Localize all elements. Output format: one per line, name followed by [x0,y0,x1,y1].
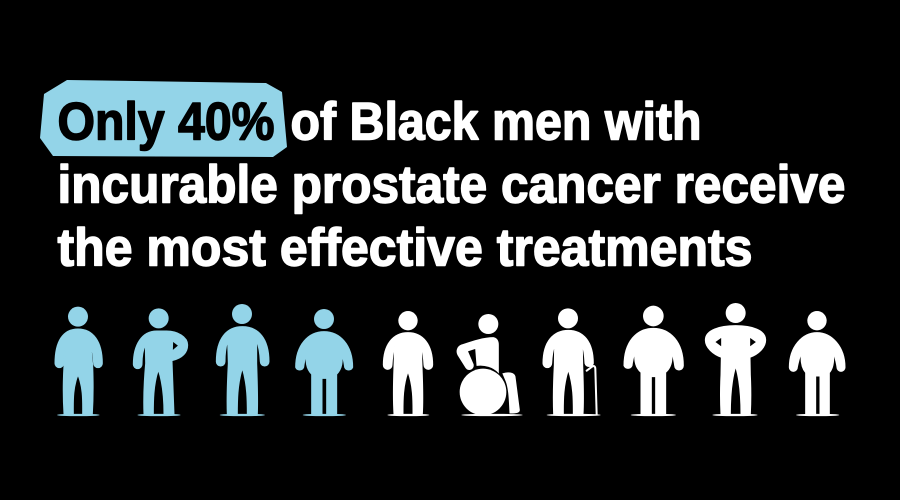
figure 1: standing man [55,307,102,416]
figure 9: man with hands on hips [705,303,766,416]
figure 6: wheelchair user [457,314,523,416]
figure 7: man with cane [543,308,601,416]
figure 10: stocky man [789,311,845,416]
figure 2: man with hand on hip [133,308,188,416]
figure 4: heavy-set man [296,309,353,416]
white figures: the remaining 60% [383,303,845,416]
headline text: incurable prostate cancer receive [58,156,846,214]
headline text [58,92,846,278]
headline text: of Black men with [290,92,702,152]
blue figures: the 40% [55,304,353,416]
highlight badge with "Only 40%" [40,80,287,157]
figure 5: standing man [383,311,433,416]
highlight badge with "Only 40%": Only 40% [58,92,274,152]
figure 8: heavy-set man [624,306,683,416]
figure 3: tall man [216,304,269,416]
headline text: the most effective treatments [58,218,752,278]
